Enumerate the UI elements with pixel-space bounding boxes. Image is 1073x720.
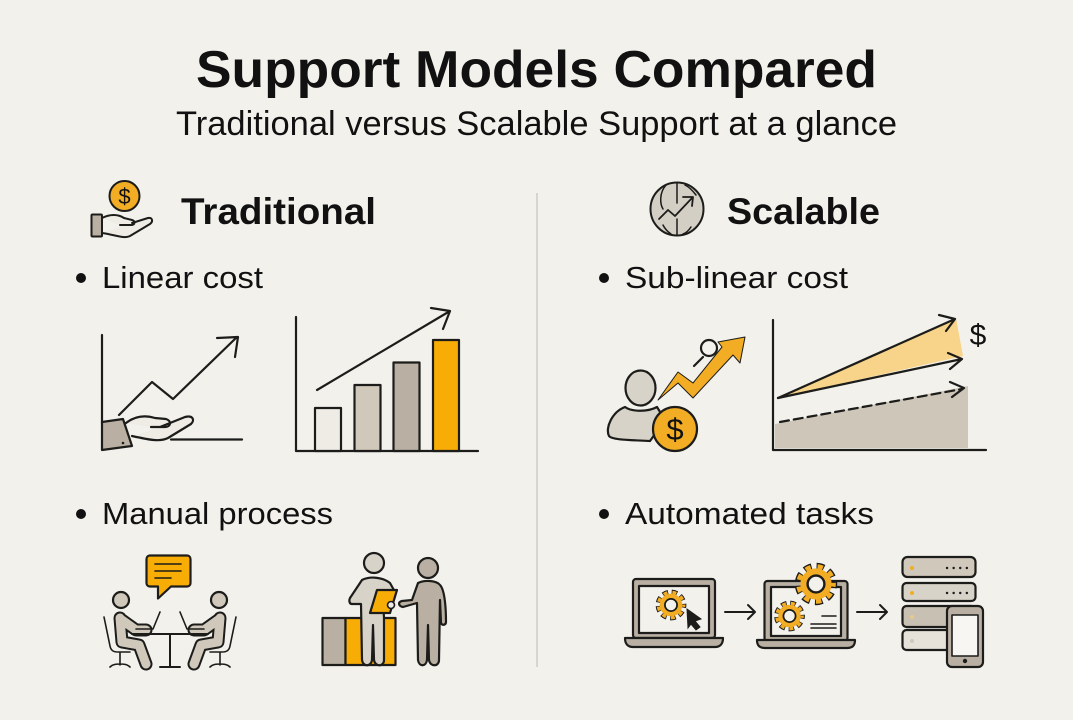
- chart: hand with rising line: [102, 335, 242, 450]
- column divider: [536, 193, 538, 667]
- chart: sub-linear cost wedge: $: [970, 319, 987, 352]
- right person: [180, 592, 236, 667]
- icon: laptop with gear and cursor: [625, 579, 723, 647]
- icon: server stack with phone: [902, 557, 983, 667]
- icon: two people with clipboard and boxes: [322, 553, 446, 665]
- arrow: laptop to servers: [857, 605, 887, 619]
- icon: person with coin and growth arrow: [608, 337, 745, 451]
- icon: two people meeting at a table: [104, 556, 236, 667]
- heading: Traditional: Traditional: [181, 191, 376, 232]
- heading: Scalable: Scalable: [727, 191, 880, 232]
- bullet: Sub-linear cost: Sub-linear cost: [625, 260, 848, 295]
- bullet: Manual process: Manual process: [102, 496, 333, 531]
- arrow: laptop to laptop: [725, 605, 755, 619]
- subtitle: Traditional versus Scalable Support at a glance: [176, 105, 897, 143]
- speech bubble: [146, 556, 190, 598]
- icon: hand holding coin: $: [118, 184, 131, 209]
- left person: [104, 592, 160, 667]
- chart: rising bars: [296, 308, 478, 451]
- bullet: Automated tasks: Automated tasks: [625, 496, 874, 531]
- bullet: Linear cost: Linear cost: [102, 260, 263, 295]
- table: [132, 634, 208, 667]
- icon: person with coin and growth arrow: $: [666, 412, 684, 447]
- icon: hand holding coin: [92, 181, 152, 237]
- chart: sub-linear cost wedge: [773, 315, 987, 450]
- icon: laptop with two gears: [757, 566, 855, 648]
- icon: globe with growth arrow: [650, 182, 704, 236]
- title: Support Models Compared: [196, 41, 877, 99]
